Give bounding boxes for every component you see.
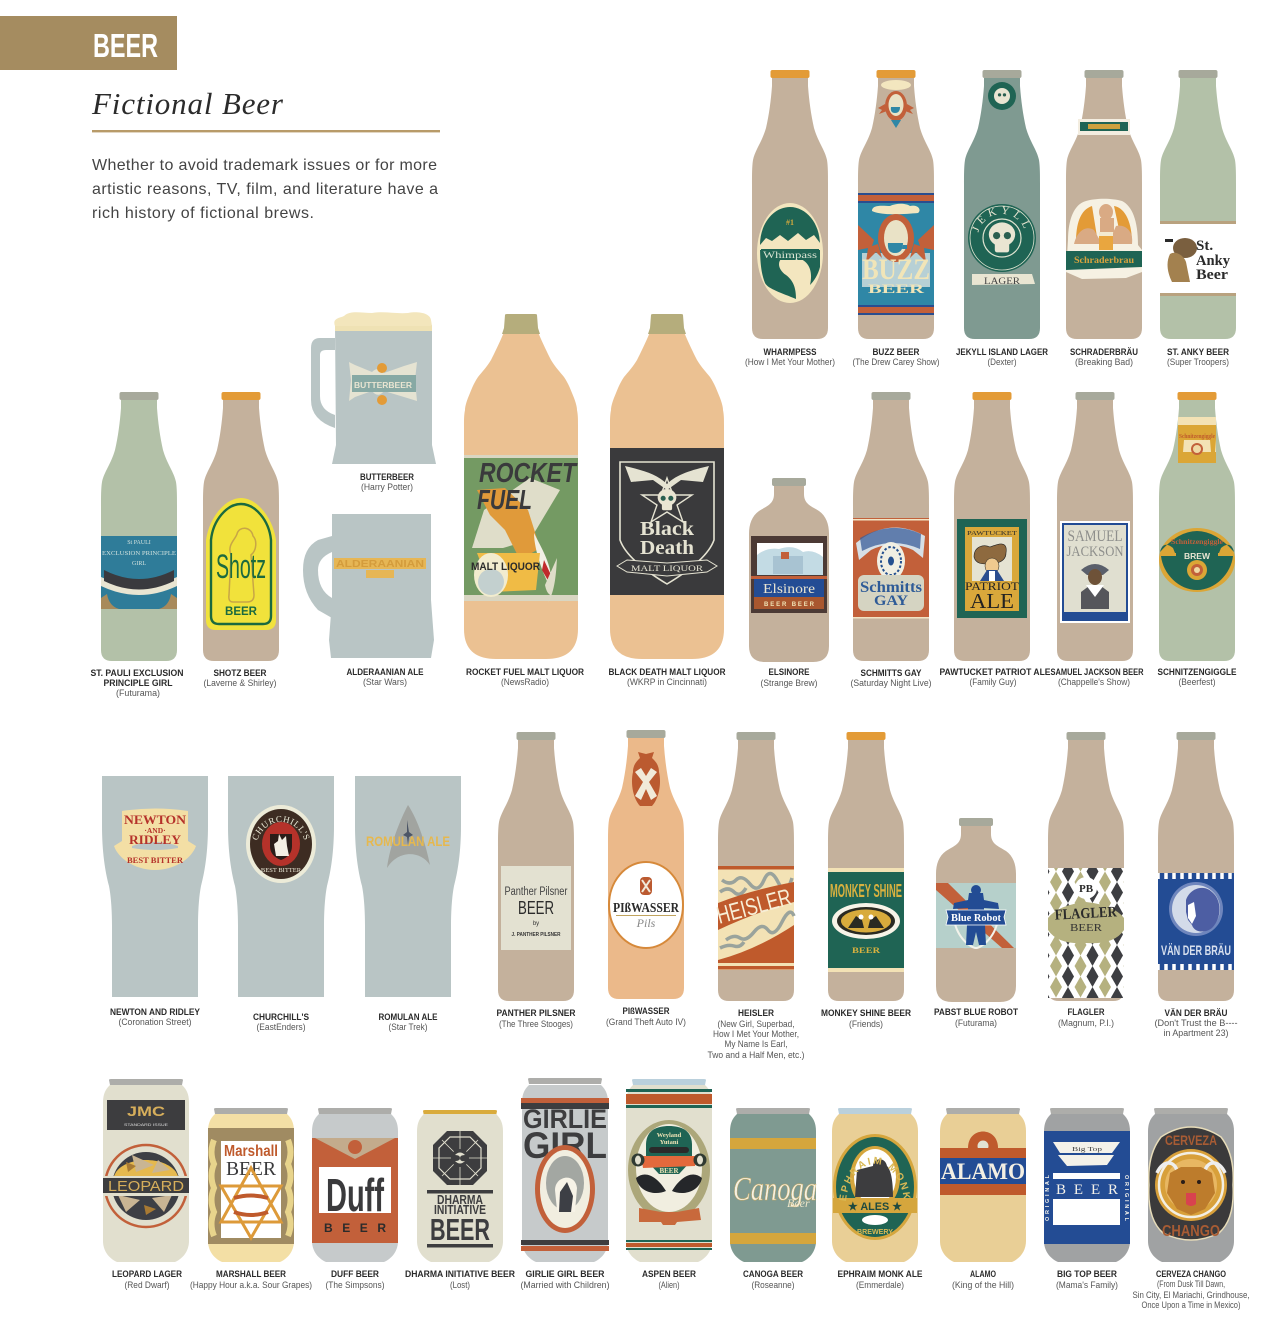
bottle: Pawtucket Patriot Ale [940,392,1050,688]
glass: Newton and Ridley [102,776,208,1028]
can: Marshall Beer [190,1108,312,1291]
mug: Alderaanian Ale: ALDERAANIAN ALE [346,666,424,677]
bottle: Elsinore [749,478,829,689]
bottle: Pawtucket Patriot Ale: PAWTUCKET PATRIOT ALE [940,666,1050,677]
can: Ephraim Monk Ale: EPHRAIM MONK ALE [838,1268,922,1279]
bottle: Flagler: FLAGLER [1054,904,1117,924]
intro text [92,157,438,222]
bottle: Shotz Beer [203,392,279,689]
can: Duff Beer: DUFF BEER [331,1268,379,1279]
bottle: Elsinore: (Strange Brew) [760,678,818,689]
can: Leopard Lager: LEOPARD LAGER [112,1268,182,1279]
bottle: Flagler: FLAGLER [1068,1006,1105,1017]
can: Big Top Beer [1044,1108,1130,1291]
bottle: Panther Pilsner: PANTHER PILSNER [496,1007,576,1018]
can: Big Top Beer: ORIGINAL [1045,1174,1051,1221]
mug: Alderaanian Ale [303,514,434,688]
glass: Churchill's [228,776,334,1033]
bottle: St. Pauli Exclusion Principle Girl: St PAULI [127,540,151,546]
bottle: Pibwasser: PIßWASSER [613,900,679,915]
can: Girlie Girl Beer: GIRLIE [523,1104,607,1134]
can: Alamo: ALAMO [970,1268,996,1279]
bottle: Shotz Beer: BEER [225,604,257,618]
can: Duff Beer: BEER [324,1221,386,1235]
bottle: Rocket Fuel Malt Liquor: ROCKET FUEL MALT LIQUOR [466,666,584,677]
glass: Churchill's: CHURCHILL'S [252,816,310,840]
can: Cerveza Chango: Sin City, El Mariachi, Grindhouse, [1132,1290,1250,1301]
can: Aspen Beer [626,1079,712,1291]
can: Dharma Initiative Beer: (Lost) [450,1280,470,1291]
can: Cerveza Chango: (From Dusk Till Dawn, [1157,1279,1225,1290]
bottle: Pawtucket Patriot Ale: (Family Guy) [970,677,1016,688]
bottle: Buzz Beer: BUZZ [862,253,930,286]
title: Fictional Beer [91,86,284,121]
bottle: St. Anky Beer [1160,70,1236,368]
bottle: Panther Pilsner: BEER [518,898,554,918]
bottle: St. Pauli Exclusion Principle Girl: PRINCIPLE GIRL [104,677,173,688]
bottle: St. Anky Beer: (Super Troopers) [1167,357,1229,368]
mug: Butterbeer: BUTTERBEER [354,381,412,390]
bottle: Jekyll Island Lager: LAGER [984,277,1021,287]
bottle: Heisler: My Name Is Earl, [724,1039,788,1050]
bottle: St. Pauli Exclusion Principle Girl: GIRL [132,561,146,567]
glass: Newton and Ridley: ·AND· [144,826,166,835]
can: Dharma Initiative Beer: INITIATIVE [434,1202,486,1217]
can: Girlie Girl Beer [520,1078,610,1291]
can: Big Top Beer: Big Top [1072,1147,1102,1153]
bottle: Schmitts Gay: Schmitts [860,579,922,596]
bottle: Heisler [708,732,804,1061]
can: Girlie Girl Beer: GIRLIE GIRL BEER [526,1268,605,1279]
bottle: Schnitzengiggle: BREW [1184,552,1210,561]
glass: Romulan Ale: ROMULAN ALE [378,1011,438,1022]
can: Leopard Lager [103,1079,189,1291]
bottle: St. Pauli Exclusion Principle Girl: (Futurama) [116,688,160,699]
bottle: Panther Pilsner: (The Three Stooges) [499,1019,573,1030]
can: Girlie Girl Beer: GIRL [523,1125,607,1166]
bottle: Monkey Shine Beer: MONKEY SHINE BEER [821,1007,911,1018]
can: Leopard Lager: STANDARD ISSUE [124,1122,168,1127]
bottle: Schnitzengiggle: Schnitzengiggle [1179,433,1215,440]
glass: Churchill's: CHURCHILL'S [253,1011,309,1022]
bottle: Schraderbrau: Schraderbrau [1074,255,1134,265]
can: Ephraim Monk Ale: BREWERY [857,1227,893,1236]
bottle: Pibwasser [606,730,686,1028]
can: Aspen Beer: (Alien) [658,1280,680,1291]
bottle: Elsinore: ELSINORE [768,666,810,677]
bottle: Van der Brau [1154,732,1238,1039]
can: Canoga Beer: Beer [787,1196,810,1210]
mug: Butterbeer [311,312,436,493]
bottle: Shotz Beer: SHOTZ BEER [214,667,267,678]
bottle: Buzz Beer [852,70,940,368]
can: Big Top Beer: BIG TOP BEER [1057,1268,1117,1279]
bottle: Pabst Blue Robot: PABST BLUE ROBOT [934,1006,1018,1017]
can: Duff Beer [312,1108,398,1291]
bottle: Pibwasser: (Grand Theft Auto IV) [606,1017,686,1028]
bottle: Van der Brau: VÄN DER BRÄU [1161,942,1231,958]
bottle: Pawtucket Patriot Ale: ALE [970,589,1014,613]
can: Ephraim Monk Ale [832,1108,922,1291]
can: Alamo: (King of the Hill) [952,1280,1014,1291]
bottle: Schnitzengiggle [1158,392,1236,688]
bottle: Pabst Blue Robot: Blue Robot [951,913,1001,924]
can: Duff Beer: Duff [326,1169,384,1221]
bottle: Heisler: HEISLER [738,1007,774,1018]
glass: Romulan Ale [355,776,461,1033]
bottle: Wharmpess: (How I Met Your Mother) [745,357,835,368]
glass: Romulan Ale: ROMULAN ALE [366,833,450,849]
bottle: Black Death Malt Liquor: (WKRP in Cincinnati) [627,677,707,688]
bottle: Wharmpess: #1 [786,218,794,227]
bottle: Schmitts Gay: SCHMITTS GAY [860,667,922,678]
glass: Churchill's: (EastEnders) [256,1022,306,1033]
bottle: Wharmpess [745,70,835,368]
bottle: Black Death Malt Liquor: Black [640,518,695,540]
bottle: Rocket Fuel Malt Liquor: ROCKET [479,457,578,488]
bottle: Black Death Malt Liquor [608,314,726,688]
bottle: Van der Brau: in Apartment 23) [1164,1028,1228,1039]
glass: Newton and Ridley: NEWTON [124,812,187,827]
intro text: rich history of fictional brews. [92,205,314,222]
bottle: Schraderbrau: (Breaking Bad) [1075,357,1133,368]
can: Ephraim Monk Ale: EPHRAIM MONK [839,1156,910,1201]
bottle: Samuel Jackson Beer: (Chappelle's Show) [1058,677,1130,688]
bottle: Pawtucket Patriot Ale: PATRIOT [965,579,1020,593]
bottle: St. Pauli Exclusion Principle Girl: EXCLUSION PRINCIPLE [102,550,176,557]
can: Duff Beer: (The Simpsons) [326,1280,384,1291]
bottle: Monkey Shine Beer: MONKEY SHINE [830,881,902,901]
glass: Newton and Ridley: NEWTON AND RIDLEY [110,1006,201,1017]
bottle: Monkey Shine Beer: (Friends) [849,1019,883,1030]
bottle: Elsinore: Elsinore [763,581,815,596]
bottle: Black Death Malt Liquor: MALT LIQUOR [631,563,703,573]
can: Ephraim Monk Ale: (Emmerdale) [856,1280,904,1291]
bottle: Rocket Fuel Malt Liquor: FUEL [477,484,532,515]
bottle: Flagler: (Magnum, P.I.) [1058,1018,1114,1029]
bottle: St. Anky Beer: Beer [1196,267,1228,283]
can: Cerveza Chango [1132,1108,1250,1311]
can: Dharma Initiative Beer: DHARMA INITIATIVE BEER [405,1268,515,1279]
bottle: Monkey Shine Beer [821,732,911,1030]
can: Big Top Beer: (Mama's Family) [1056,1280,1118,1291]
bottle: Pawtucket Patriot Ale: PAWTUCKET [967,530,1017,537]
bottle: Flagler [1048,732,1124,1029]
bottle: Heisler: (New Girl, Superbad, [718,1019,794,1030]
bottle: Van der Brau: VÄN DER BRÄU [1164,1007,1228,1018]
can: Canoga Beer: Canoga [733,1171,817,1208]
can: Aspen Beer: Weyland [657,1132,682,1139]
bottle: Black Death Malt Liquor: BLACK DEATH MALT LIQUOR [608,666,726,677]
can: Marshall Beer: Marshall [224,1143,278,1160]
bottle: Schmitts Gay: (Saturday Night Live) [850,678,932,689]
bottle: Jekyll Island Lager: JEKYLL ISLAND LAGER [956,346,1048,357]
can: Big Top Beer: ORIGINAL [1123,1175,1129,1222]
bottle: Samuel Jackson Beer: JACKSON [1066,544,1124,560]
bottle: Pabst Blue Robot: (Futurama) [955,1018,997,1029]
bottle: Schraderbrau: SCHRADERBRÄU [1070,346,1138,357]
bottle: Pibwasser: Pils [636,916,656,930]
bottle: Jekyll Island Lager: (Dexter) [988,357,1016,368]
bottle: Van der Brau: (Don't Trust the B---- [1154,1018,1238,1029]
bottle: Pibwasser: PIßWASSER [622,1005,670,1016]
can: Canoga Beer: (Roseanne) [752,1280,794,1291]
bottle: St. Pauli Exclusion Principle Girl [90,392,184,699]
can: Cerveza Chango: Once Upon a Time in Mexico) [1142,1300,1240,1311]
can: Alamo [940,1108,1026,1291]
bottle: Samuel Jackson Beer: SAMUEL [1068,528,1122,545]
can: Canoga Beer: CANOGA BEER [743,1268,803,1279]
bottle: Buzz Beer: BEER [868,281,925,296]
bottle: Heisler: How I Met Your Mother, [713,1029,799,1040]
can: Aspen Beer: Yutani [660,1139,678,1146]
bottle: Schnitzengiggle: SCHNITZENGIGGLE [1158,666,1236,677]
can: Leopard Lager: JMC [127,1103,165,1119]
glass: Newton and Ridley: BEST BITTER [127,855,184,865]
bottle: Elsinore: BEER BEER [764,602,815,608]
can: Marshall Beer: MARSHALL BEER [216,1268,286,1279]
bottle: Buzz Beer: (The Drew Carey Show) [852,357,940,368]
can: Big Top Beer: BEER [1056,1182,1118,1198]
can: Leopard Lager: (Red Dwarf) [124,1280,170,1291]
bottle: Shotz Beer: (Laverne & Shirley) [204,678,276,689]
can: Cerveza Chango: CHANGO [1162,1223,1220,1240]
bottle: Flagler: BEER [1070,922,1103,934]
mug: Butterbeer: (Harry Potter) [361,482,413,493]
glass: Romulan Ale: (Star Trek) [388,1022,428,1033]
bottle: St. Pauli Exclusion Principle Girl: ST. PAULI EXCLUSION [90,667,184,678]
bottle: Pabst Blue Robot [934,818,1018,1029]
can: Cerveza Chango: CERVEZA [1165,1132,1217,1148]
mug: Alderaanian Ale: ALDERAANIAN [336,559,424,570]
can: Ephraim Monk Ale: ★ ALES ★ [848,1201,902,1213]
bottle: Schraderbrau [1066,70,1142,368]
bottle: Rocket Fuel Malt Liquor: (NewsRadio) [501,677,549,688]
can: Dharma Initiative Beer: BEER [430,1212,490,1247]
can: Marshall Beer: (Happy Hour a.k.a. Sour Grapes) [190,1280,312,1291]
mug: Alderaanian Ale: (Star Wars) [363,677,407,688]
bottle: Buzz Beer: BUZZ BEER [872,346,920,357]
bottle: St. Anky Beer: Anky [1196,253,1230,269]
can: Dharma Initiative Beer: DHARMA [437,1192,483,1207]
bottle: Panther Pilsner: by [533,921,539,927]
bottle: Heisler: HEISLER [714,884,794,930]
bottle: Schnitzengiggle: (Beerfest) [1178,677,1216,688]
can: Marshall Beer: BEER [226,1158,277,1180]
bottle: Black Death Malt Liquor: Death [640,537,694,559]
mug: Butterbeer: BUTTERBEER [360,471,414,482]
bottle: Wharmpess: WHARMPESS [764,346,816,357]
bottle: Samuel Jackson Beer: SAMUEL JACKSON BEER [1050,666,1144,677]
glass: Newton and Ridley: RIDLEY [129,832,182,847]
bottle: Schmitts Gay [850,392,932,689]
can: Aspen Beer: BEER [659,1167,679,1175]
bottle: St. Anky Beer: ST. ANKY BEER [1167,346,1229,357]
bottle: Samuel Jackson Beer [1050,392,1144,688]
glass: Newton and Ridley: (Coronation Street) [118,1017,192,1028]
can: Alamo: ALAMO [941,1159,1025,1184]
glass: Churchill's: BEST BITTER [261,867,302,874]
bottle: Panther Pilsner: Panther Pilsner [504,886,568,898]
bottle: Wharmpess: Whimpass [763,251,817,261]
bottle: Jekyll Island Lager: JEKYLL [972,206,1030,232]
bottle: Panther Pilsner [496,732,576,1030]
header tab [0,16,177,70]
can: Leopard Lager: LEOPARD [108,1179,184,1195]
bottle: Flagler: PB [1079,883,1094,895]
bottle: Rocket Fuel Malt Liquor: MALT LIQUOR [471,561,540,573]
header tab: BEER [93,27,158,64]
can: Cerveza Chango: CERVEZA CHANGO [1156,1268,1226,1279]
can: Girlie Girl Beer: (Married with Children) [520,1280,610,1291]
bottle: Panther Pilsner: J. PANTHER PILSNER [512,932,561,938]
intro text: Whether to avoid trademark issues or for more [92,157,437,174]
intro text: artistic reasons, TV, film, and literature have a [92,181,438,198]
bottle: Schnitzengiggle: Schnitzengiggle [1171,537,1224,546]
bottle: St. Anky Beer: St. [1196,238,1213,254]
can: Canoga Beer [730,1108,817,1291]
bottle: Shotz Beer: Shotz [216,548,266,586]
bottle: Monkey Shine Beer: BEER [852,946,880,955]
bottle: Schmitts Gay: GAY [874,593,909,609]
bottle: Rocket Fuel Malt Liquor [464,314,584,688]
can: Aspen Beer: ASPEN BEER [642,1268,696,1279]
bottle: Jekyll Island Lager [956,70,1048,368]
can: Dharma Initiative Beer [405,1110,515,1291]
bottle: Heisler: Two and a Half Men, etc.) [708,1050,804,1061]
